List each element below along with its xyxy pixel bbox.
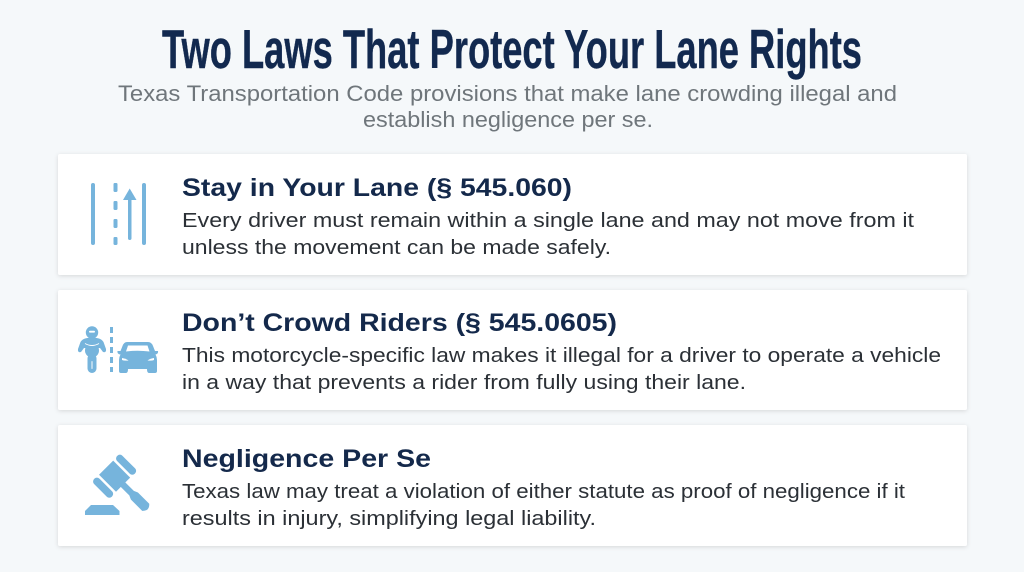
body text: This motorcycle-specific law makes it illegal for a driver to operate a vehicle [182,345,941,367]
body text [182,345,941,394]
subtitle [118,81,897,132]
lane divider [110,327,113,372]
subtitle: establish negligence per se. [363,107,653,132]
card background [58,154,967,275]
subtitle: Texas Transportation Code provisions that make lane crowding illegal and [118,81,897,106]
card background [58,425,967,546]
body text [182,210,915,259]
heading: Don’t Crowd Riders (§ 545.0605) [182,309,617,337]
body text: unless the movement can be made safely. [182,237,611,259]
icon: car [117,342,158,373]
body text: in a way that prevents a rider from fully using their lane. [182,372,746,394]
icon: gavel [85,453,162,523]
heading: Negligence Per Se [182,445,431,473]
icon: lane lines with arrow [91,183,146,245]
heading: Stay in Your Lane (§ 545.060) [182,174,572,202]
body text: Every driver must remain within a single lane and may not move from it [182,210,915,232]
body text: Texas law may treat a violation of either statute as proof of negligence if it [182,481,905,503]
body text [182,481,905,530]
panel: stay in your lane [58,154,967,275]
card background [58,290,967,410]
body text: results in injury, simplifying legal liability. [182,508,596,530]
panel: negligence per se [58,425,967,546]
panel: don't crowd riders [58,290,967,410]
icon: motorcycle rider [78,326,106,373]
icon: motorcycle beside car [78,326,158,373]
